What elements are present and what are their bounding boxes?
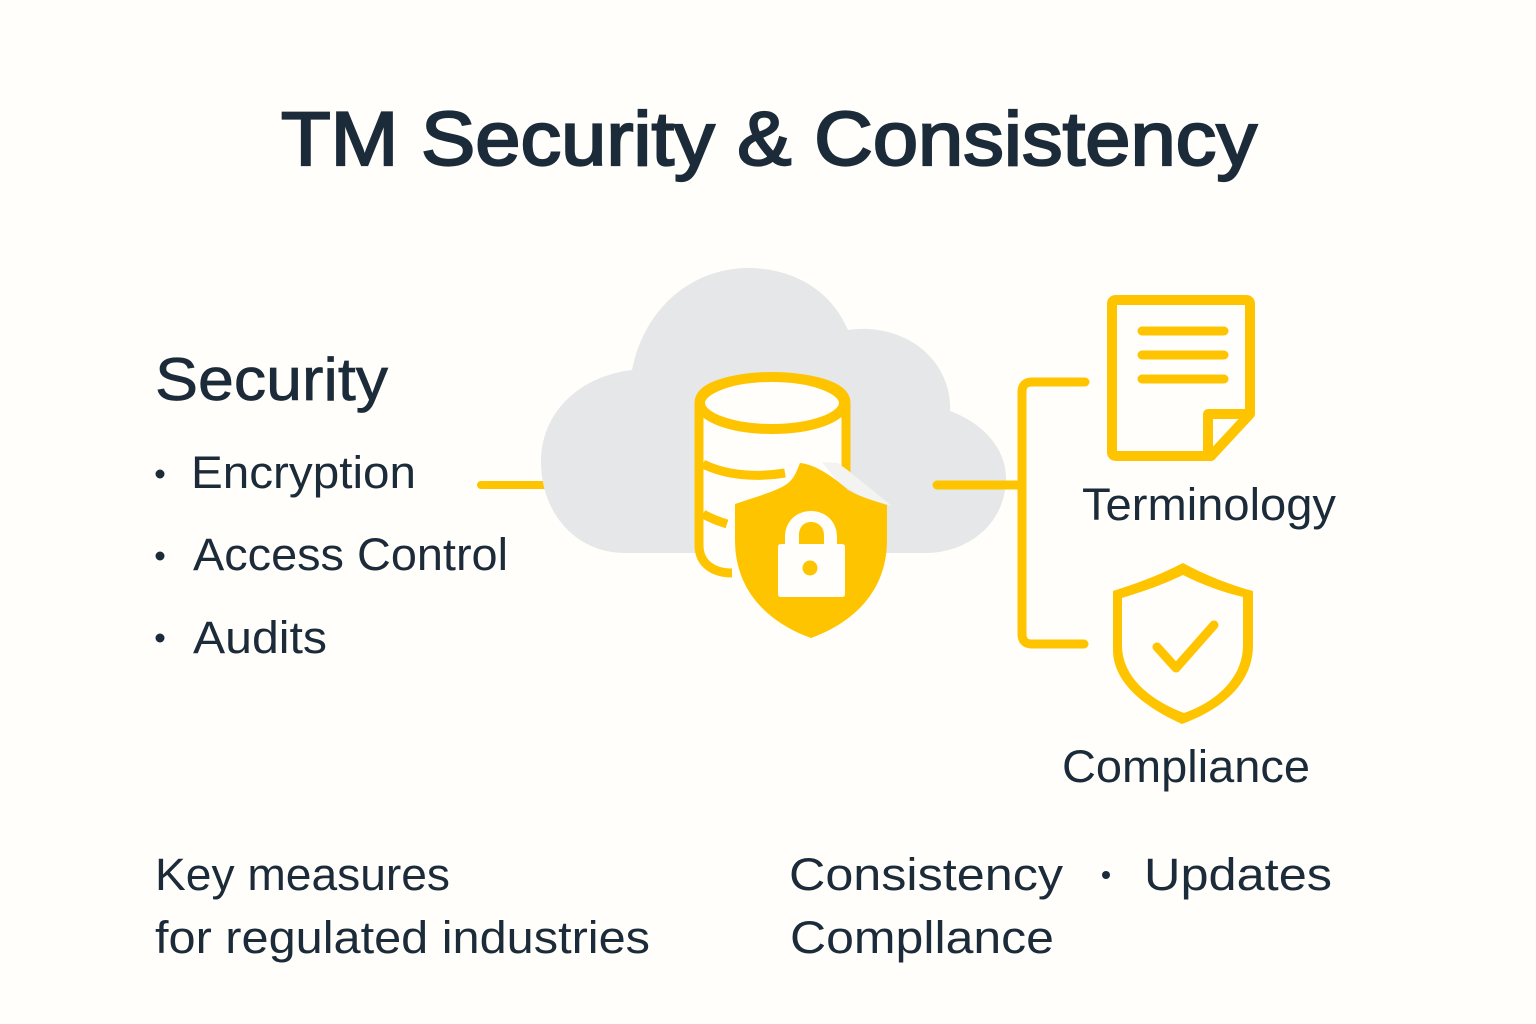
panel: security list [155,346,508,663]
label: compliance: Compliance [1062,741,1310,792]
icon: compliance shield [1113,563,1253,724]
icon: database with shield [699,377,892,638]
database cylinder [699,377,846,573]
label: terminology: Terminology [1082,479,1337,530]
text block: key measures: Key measures [155,849,450,900]
icon: document [1112,300,1250,456]
text block: consistency, updates, compliance: Updates [1144,849,1332,900]
text block: consistency, updates, compliance [789,849,1332,963]
list item: audits: Audits [193,612,327,663]
icon: cloud [541,268,1006,553]
text block: consistency, updates, compliance: Compllance [790,912,1054,963]
text block: consistency, updates, compliance: Consistency [789,849,1064,900]
text block: key measures: for regulated industries [155,912,650,963]
connector: security to cloud [481,481,548,489]
text block: key measures [155,849,650,963]
list item: access control: Access Control [193,529,508,580]
title: TM Security & Consistency [281,97,1257,182]
list item: encryption: Encryption [191,447,416,498]
heading: security: Security [155,346,388,413]
shield with padlock [735,462,892,638]
connector: cloud to branches [937,382,1085,644]
